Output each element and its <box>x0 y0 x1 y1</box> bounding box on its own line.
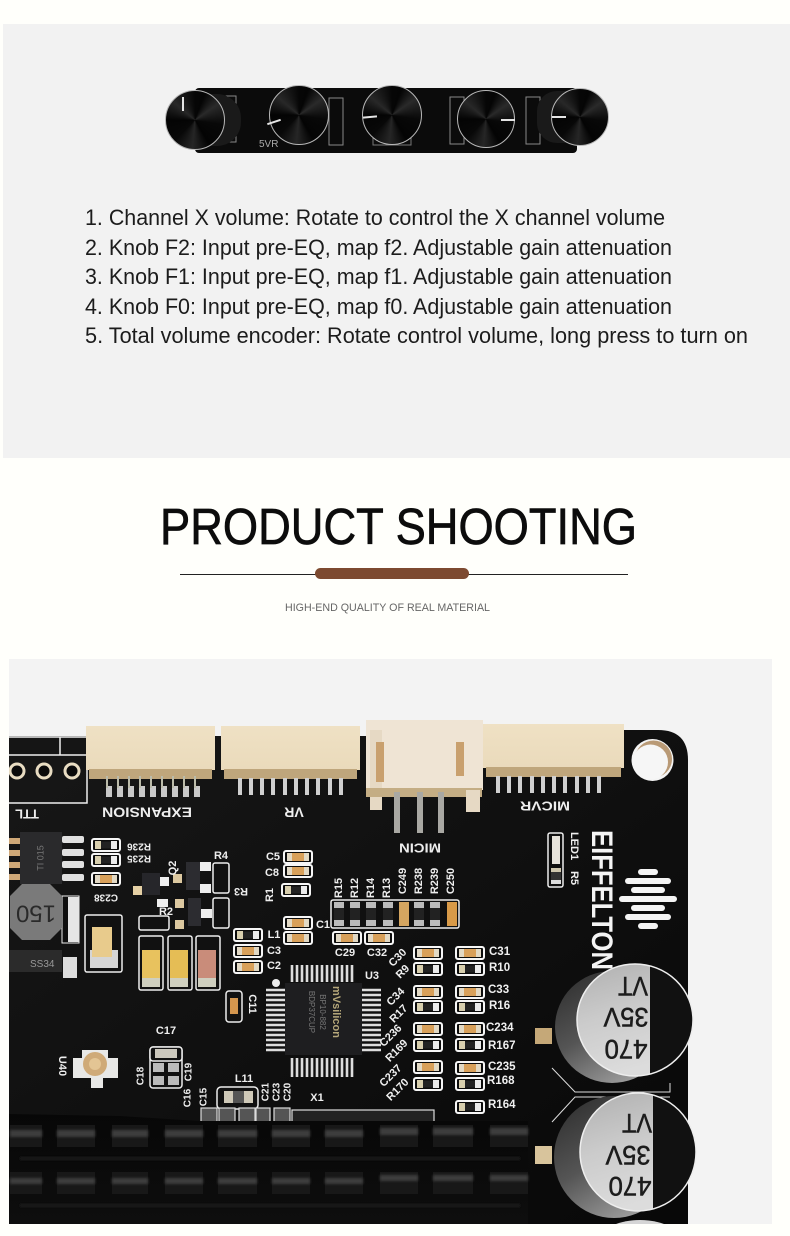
heading: PRODUCT SHOOTING <box>160 498 637 555</box>
knob board PCB <box>195 88 577 153</box>
C29 C32: C29 <box>335 947 355 959</box>
C17 C18 C19 group: C18 <box>136 1066 147 1085</box>
right columns of resistors and capacitors: R10 <box>489 962 510 974</box>
transistors Q2 and resistors R2 R3 R4: R3 <box>234 885 248 897</box>
right columns of resistors and capacitors: C34 <box>385 985 408 1008</box>
power regulator chip: TI 015 <box>35 845 45 871</box>
connector: EXPANSION: EXPANSION <box>102 804 192 820</box>
tantalum capacitor <box>85 915 122 972</box>
TTL header: TTL <box>15 807 39 822</box>
resistor row R15 to C250: R15 <box>333 878 345 898</box>
L1 C3 C2 <box>234 929 281 973</box>
connector: VR: VR <box>284 804 304 820</box>
C17 C18 C19 group: C17 <box>156 1025 176 1037</box>
connector: MICIN <box>366 720 483 856</box>
main chip U3: U3 <box>365 970 379 982</box>
panel: knob board background <box>3 24 790 458</box>
knob 4 <box>457 90 515 148</box>
mounting hole <box>632 739 674 781</box>
panel: product photo <box>9 659 772 1236</box>
C1 cluster <box>284 917 330 944</box>
C17 C18 C19 group: C19 <box>184 1062 195 1081</box>
transistors Q2 and resistors R2 R3 R4 <box>133 850 248 930</box>
inductor 150 <box>10 884 79 943</box>
inductor L11 <box>217 1073 324 1109</box>
resistor row R15 to C250: R13 <box>381 878 393 898</box>
L1 C3 C2: L1 <box>268 929 280 941</box>
right columns of resistors and capacitors: C31 <box>489 946 511 958</box>
main chip U3: BDP37CUP <box>307 991 316 1033</box>
connector: MICVR: MICVR <box>519 799 570 814</box>
instruction list: 2. Knob F2: Input pre-EQ, map f2. Adjustable gain attenuation <box>85 235 672 260</box>
right columns of resistors and capacitors: C30 <box>387 947 409 969</box>
main chip U3: BP10-882 <box>318 994 327 1030</box>
right columns of resistors and capacitors: R16 <box>489 1000 510 1012</box>
capacitor: bottom 470 35V <box>552 1090 703 1218</box>
LED1 and R5: LED1 <box>568 832 580 860</box>
L1 C3 C2: C2 <box>267 960 281 972</box>
R236 R235 C238 group <box>92 839 151 902</box>
right columns of resistors and capacitors: R17 <box>388 1003 410 1025</box>
diode SS34: SS34 <box>30 959 55 970</box>
instruction list: 3. Knob F1: Input pre-EQ, map f1. Adjustable gain attenuation <box>85 264 672 289</box>
inductor L11: C20 <box>283 1082 294 1101</box>
LED1 and R5: R5 <box>568 871 580 885</box>
C17 C18 C19 group <box>136 1025 210 1107</box>
C5 C8 R1: C8 <box>265 867 279 879</box>
R236 R235 C238 group: R236 <box>127 840 151 851</box>
transistors Q2 and resistors R2 R3 R4: R4 <box>214 850 229 862</box>
capacitor: cropped third <box>616 1220 664 1224</box>
right columns of resistors and capacitors: R164 <box>488 1099 516 1111</box>
knob 5 <box>537 88 609 146</box>
right columns of resistors and capacitors <box>377 946 516 1113</box>
right columns of resistors and capacitors: R169 <box>383 1037 410 1064</box>
C5 C8 R1: C5 <box>266 851 280 863</box>
diode SS34 <box>9 950 77 978</box>
instruction list: 1. Channel X volume: Rotate to control the X channel volume <box>85 205 665 230</box>
inductor 150: 150 <box>16 900 56 927</box>
C5 C8 R1 <box>264 851 312 902</box>
knob 1 <box>165 90 241 150</box>
right columns of resistors and capacitors: R9 <box>394 963 412 981</box>
right columns of resistors and capacitors: R167 <box>488 1040 516 1052</box>
inductor L11: C23 <box>272 1082 283 1101</box>
inductor L11: C21 <box>261 1082 272 1101</box>
inductor L11: L11 <box>235 1073 253 1085</box>
three large capacitors <box>139 936 220 990</box>
instruction list: 5. Total volume encoder: Rotate control volume, long press to turn on <box>85 323 748 348</box>
R236 R235 C238 group: C238 <box>94 891 118 902</box>
capacitor: top 470 35V: VT <box>618 971 648 1001</box>
subheading: HIGH-END QUALITY OF REAL MATERIAL <box>285 602 490 614</box>
capacitor C11: C11 <box>246 994 258 1014</box>
power regulator chip <box>9 832 84 884</box>
antenna connector U40 <box>56 1050 118 1088</box>
resistor row R15 to C250: C249 <box>397 868 409 894</box>
capacitor C11 <box>226 991 258 1022</box>
resistor row R15 to C250: C250 <box>445 868 457 894</box>
C5 C8 R1: R1 <box>264 888 276 902</box>
capacitor: top 470 35V: 35V <box>604 1002 648 1032</box>
capacitor: bottom 470 35V: 35V <box>606 1140 650 1170</box>
right columns of resistors and capacitors: R168 <box>487 1075 515 1087</box>
resistor row R15 to C250: R12 <box>349 878 361 898</box>
L1 C3 C2: C3 <box>267 945 281 957</box>
TTL header <box>9 737 87 822</box>
antenna connector U40: U40 <box>56 1056 68 1076</box>
main chip U3 <box>266 965 381 1077</box>
instruction list <box>85 205 748 348</box>
brand name: EIFFELTON <box>585 830 618 970</box>
C17 C18 C19 group: C16 <box>183 1088 194 1107</box>
resistor row R15 to C250: R238 <box>413 868 425 894</box>
solder pads <box>535 1028 552 1164</box>
right columns of resistors and capacitors: C237 <box>377 1062 404 1089</box>
connector: MICVR <box>483 724 624 814</box>
connector: EXPANSION <box>86 726 215 820</box>
capacitor: bottom 470 35V: 470 <box>608 1171 652 1201</box>
instruction list: 4. Knob F0: Input pre-EQ, map f0. Adjustable gain attenuation <box>85 294 672 319</box>
resistor row R15 to C250: R14 <box>365 877 377 898</box>
knob 3 <box>362 85 422 145</box>
inductor L11: X1 <box>310 1092 324 1104</box>
connector: VR <box>221 726 360 820</box>
knob 2 <box>269 85 329 145</box>
right columns of resistors and capacitors: C236 <box>377 1022 404 1049</box>
right columns of resistors and capacitors: C235 <box>488 1061 516 1073</box>
heat sink <box>9 1114 529 1207</box>
transistors Q2 and resistors R2 R3 R4: Q2 <box>167 861 179 875</box>
C29 C32 <box>333 932 393 959</box>
main chip U3: mVsilicon <box>330 986 342 1038</box>
C29 C32: C32 <box>367 947 387 959</box>
heading divider <box>180 568 628 579</box>
row of pads beside crystal <box>200 1107 435 1121</box>
transistors Q2 and resistors R2 R3 R4: R2 <box>159 906 173 918</box>
resistor row R15 to C250 <box>331 868 459 928</box>
connector: MICIN: MICIN <box>399 841 441 856</box>
icon: brand sound-wave logo <box>619 869 677 929</box>
board label: 5VR <box>259 139 278 150</box>
right columns of resistors and capacitors: R170 <box>384 1076 411 1103</box>
resistor row R15 to C250: R239 <box>429 868 441 894</box>
capacitor: top 470 35V: 470 <box>604 1034 648 1064</box>
R236 R235 C238 group: R235 <box>127 852 151 863</box>
right columns of resistors and capacitors: C234 <box>486 1022 514 1034</box>
right columns of resistors and capacitors: C33 <box>488 984 509 996</box>
LED1 and R5 <box>548 832 580 887</box>
C1 cluster: C1 <box>316 919 330 931</box>
C17 C18 C19 group: C15 <box>199 1087 210 1106</box>
capacitor: bottom 470 35V: VT <box>622 1108 652 1138</box>
capacitor: top 470 35V <box>552 960 700 1092</box>
circuit board <box>9 730 688 1224</box>
